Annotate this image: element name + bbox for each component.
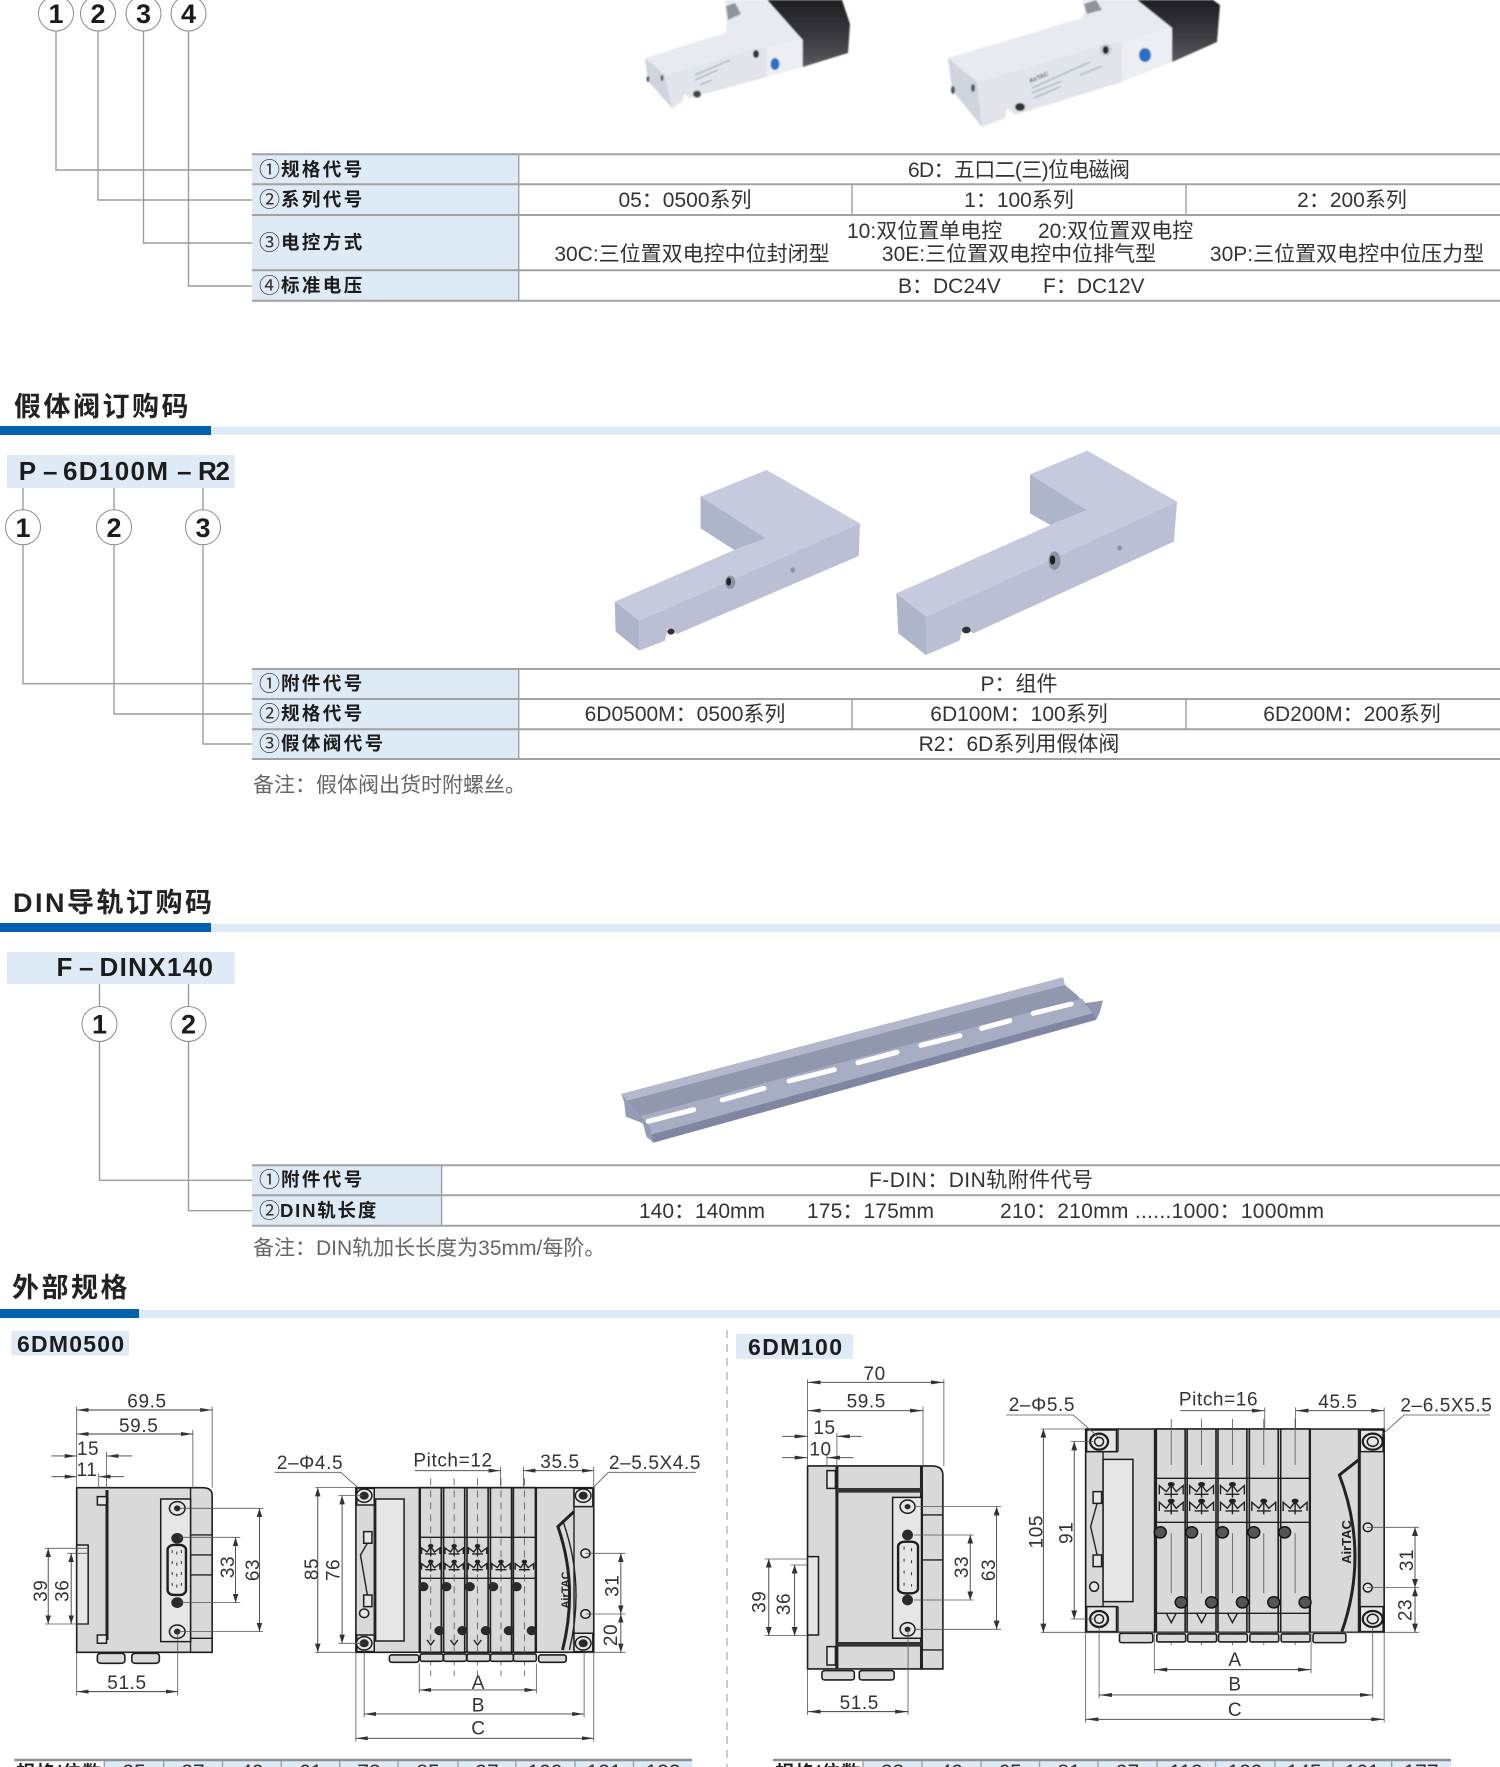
- dimension labels: 6DM0500 front view: 76: [324, 1559, 344, 1581]
- dimension labels: 6DM100 side view: 70: [864, 1364, 886, 1385]
- corner mounting holes: [1090, 1434, 1383, 1627]
- row 1: spec code: [259, 159, 1130, 182]
- heading: external dimensions: [0, 1273, 1500, 1318]
- dimension lines: front view: [275, 1467, 696, 1742]
- row 4: rated voltage: B：DC24V: [898, 275, 1001, 298]
- row 4: rated voltage: F：DC12V: [1043, 275, 1145, 298]
- row 2: series code: 系列代号: [281, 189, 365, 210]
- row 1: accessory code: [259, 673, 1058, 696]
- row 1: accessory code: 附件代号: [281, 1169, 365, 1190]
- dimension labels: 6DM100 front view: 105: [1026, 1515, 1047, 1548]
- code box: P-6D100M-R2: –: [43, 456, 57, 486]
- row 1: accessory code: P：组件: [980, 673, 1058, 696]
- row 3: dummy valve code: R2：6D系列用假体阀: [919, 733, 1119, 756]
- row 1: spec code: 6D：五口二(三)位电磁阀: [908, 159, 1130, 182]
- row 2: rail length: 210：210mm ......1000：1000mm: [1000, 1200, 1324, 1223]
- push-in fittings: [1119, 1633, 1346, 1643]
- row 2: spec code: 6D0500M：0500系列: [585, 703, 785, 726]
- dimension labels: 6DM0500 side view: 69.5: [127, 1392, 167, 1412]
- dimension labels: 6DM100 front view: 45.5: [1318, 1392, 1358, 1413]
- dimension labels: 6DM0500 front view: B: [472, 1696, 485, 1716]
- row 2: rail length: 140：140mm: [639, 1200, 765, 1223]
- DIN rail code circles and leaders: 1: [92, 1010, 107, 1040]
- dimension labels: 6DM0500 side view: 59.5: [119, 1416, 158, 1437]
- row 2: series code: ②: [259, 189, 280, 212]
- dimension labels: 6DM0500 front view: 2–Φ4.5: [277, 1453, 343, 1474]
- row 2: series code: 05：0500系列: [618, 189, 752, 212]
- row 2: spec code: 6D100M：100系列: [930, 703, 1108, 726]
- dimension labels: 6DM0500 front view: 20: [601, 1624, 622, 1646]
- heading: dummy valve ordering code: [0, 392, 1500, 435]
- photo: larger solenoid valve: [948, 0, 1220, 127]
- row 3: electric control type: 30E:三位置双电控中位排气型: [882, 243, 1156, 266]
- dimension labels: 6DM0500 side view: 33: [218, 1556, 239, 1578]
- row 3: electric control type: 20:双位置双电控: [1038, 220, 1193, 243]
- manifold valve stations: [418, 1478, 537, 1676]
- dimension labels: 6DM0500 front view: 2–5.5X4.5: [609, 1453, 701, 1474]
- row 1: accessory code: [259, 1169, 1093, 1192]
- push-in fittings: [389, 1654, 566, 1662]
- photo: DIN rail: [621, 977, 1103, 1143]
- row 2: spec code: 规格代号: [281, 703, 365, 724]
- dimension labels: 6DM100 side view: 36: [774, 1593, 795, 1615]
- heading: DIN rail ordering code: [0, 888, 1500, 932]
- dimension labels: 6DM100 front view: C: [1228, 1700, 1242, 1721]
- leader lines from code circles to table rows: [56, 31, 252, 286]
- dimension labels: 6DM100 front view: AirTAC: [1339, 1519, 1354, 1564]
- row 4: rated voltage: 标准电压: [281, 275, 365, 296]
- row 3: electric control type: 电控方式: [281, 232, 365, 253]
- divider between models: [726, 1330, 728, 1767]
- row 3: dummy valve code: 假体阀代号: [281, 733, 386, 754]
- dimension labels: 6DM100 front view: [1009, 1390, 1492, 1721]
- dimension labels: 6DM100 front view: 31: [1397, 1549, 1418, 1571]
- dummy valve code circles and leaders: 1: [15, 513, 31, 543]
- dimension labels: 6DM100 side view: [749, 1364, 1000, 1714]
- larger block: [896, 451, 1177, 655]
- manifold valve stations: [1154, 1419, 1311, 1645]
- row 2: spec code: [259, 703, 1441, 726]
- dimension labels: 6DM100 side view: 10: [809, 1440, 832, 1460]
- note: DIN rail: 备注：DIN轨加长长度为35mm/每阶。: [253, 1237, 605, 1260]
- row 3: electric control type: 30P:三位置双电控中位压力型: [1210, 243, 1484, 266]
- dimension labels: 6DM100 side view: 63: [979, 1559, 1000, 1581]
- dimension labels: 6DM100 side view: 15: [813, 1418, 836, 1439]
- dimension labels: 6DM0500 side view: 51.5: [107, 1673, 147, 1694]
- row 4: rated voltage: ④: [259, 275, 280, 298]
- row 1: spec code: 规格代号: [281, 159, 365, 180]
- drawing: 6DM100 front view: [1006, 1407, 1490, 1723]
- row 2: series code: 2：200系列: [1297, 189, 1407, 212]
- dimension labels: 6DM0500 side view: 39: [31, 1580, 52, 1602]
- dimension labels: 6DM0500 side view: 15: [77, 1439, 99, 1460]
- dimension labels: 6DM100 side view: 39: [749, 1591, 770, 1613]
- dimension labels: 6DM100 front view: A: [1228, 1650, 1242, 1671]
- row 1: accessory code: F-DIN：DIN轨附件代号: [869, 1169, 1093, 1192]
- row 3: electric control type: 30C:三位置双电控中位封闭型: [554, 243, 830, 266]
- photo: smaller solenoid valve: [645, 0, 850, 108]
- code circle 3: [126, 0, 161, 31]
- photo: dummy valve blocks: [615, 451, 1177, 655]
- code box: P-6D100M-R2: [7, 455, 234, 488]
- model tag: 6DM100: 6DM100: [748, 1334, 842, 1360]
- code box: P-6D100M-R2: R2: [198, 456, 230, 486]
- heading: DIN rail ordering code: DIN导轨订购码: [13, 888, 214, 918]
- corner mounting holes: [356, 1489, 591, 1650]
- row 2: spec code: ②: [259, 703, 280, 726]
- table: DIN rail code explanation: [252, 1165, 1500, 1226]
- heading: dummy valve ordering code: 假体阀订购码: [14, 392, 191, 422]
- photo: larger solenoid valve: AirTAC: [1029, 71, 1050, 85]
- row 2: rail length: DIN轨长度: [280, 1200, 378, 1221]
- row 3: electric control type: ③: [259, 232, 280, 255]
- row 2: series code: 1：100系列: [964, 189, 1074, 212]
- code box: F-DINX140: DINX140: [100, 952, 213, 982]
- dimension labels: 6DM0500 front view: [277, 1450, 701, 1740]
- code circle 2: [80, 0, 116, 31]
- dimension labels: 6DM0500 side view: 11: [77, 1460, 97, 1481]
- dimension labels: 6DM0500 front view: 31: [602, 1575, 624, 1597]
- code circle 4: [171, 0, 206, 31]
- row 1: accessory code: ①: [259, 673, 280, 696]
- dimension lines: side view: [765, 1379, 1001, 1715]
- dimension labels: 6DM0500 side view: 36: [52, 1580, 74, 1602]
- code box: F-DINX140: –: [79, 952, 93, 982]
- row 2: rail length: [259, 1200, 1324, 1223]
- dimension labels: 6DM0500 side view: [31, 1392, 264, 1694]
- DIN rail code circles and leaders: [82, 984, 252, 1211]
- dummy valve code circles and leaders: 2: [106, 513, 122, 543]
- dimension labels: 6DM100 side view: 33: [952, 1556, 973, 1578]
- dimension labels: 6DM100 front view: 91: [1056, 1522, 1077, 1544]
- code box: F-DINX140: F: [56, 952, 72, 982]
- table: 6DM100 dimensions (cropped at page bottom): [773, 1760, 1451, 1767]
- row 2: rail length: ②: [259, 1200, 280, 1223]
- model tag: 6DM0500: 6DM0500: [17, 1331, 124, 1357]
- table: dummy valve code explanation: [252, 669, 1500, 759]
- dimension labels: 6DM100 front view: Pitch=16: [1179, 1390, 1258, 1410]
- dimension labels: 6DM100 front view: 23: [1396, 1599, 1416, 1621]
- table: valve code explanation: [252, 154, 1500, 301]
- drawing: 6DM0500 front view: [275, 1467, 696, 1742]
- row 3: electric control type: [259, 220, 1484, 266]
- dimension lines: side view: [45, 1407, 263, 1696]
- row 1: spec code: ①: [259, 159, 280, 182]
- dimension labels: 6DM100 front view: 2–6.5X5.5: [1400, 1396, 1492, 1416]
- code box: P-6D100M-R2: 6D100M: [63, 456, 168, 486]
- row 1: accessory code: ①: [259, 1169, 280, 1192]
- code box: P-6D100M-R2: P: [19, 456, 36, 486]
- top section: ordering code diagram: [38, 0, 252, 286]
- dummy valve code circles and leaders: [6, 488, 252, 744]
- dimension labels: 6DM0500 front view: AirTAC: [560, 1571, 572, 1609]
- row 3: electric control type: 10:双位置单电控: [847, 220, 1002, 243]
- dimension labels: 6DM100 front view: B: [1228, 1674, 1242, 1696]
- drawing: 6DM100 side view: [765, 1379, 1001, 1715]
- dimension lines: front view: [1006, 1407, 1490, 1723]
- dimension labels: 6DM0500 front view: 85: [302, 1558, 323, 1580]
- row 1: accessory code: 附件代号: [281, 673, 365, 694]
- heading: external dimensions: 外部规格: [12, 1273, 130, 1303]
- dimension labels: 6DM100 side view: 51.5: [840, 1693, 879, 1714]
- table: 6DM0500 dimensions (cropped at page bottom): [14, 1760, 692, 1767]
- code circle 1: [38, 0, 74, 31]
- row 2: series code: [259, 189, 1407, 212]
- note: dummy valve: 备注：假体阀出货时附螺丝。: [253, 774, 526, 797]
- dimension labels: 6DM0500 front view: Pitch=12: [413, 1450, 493, 1472]
- row 2: rail length: 175：175mm: [807, 1200, 934, 1223]
- row 2: spec code: 6D200M：200系列: [1263, 703, 1441, 726]
- DIN rail code circles and leaders: 2: [181, 1010, 196, 1040]
- row 3: dummy valve code: ③: [259, 733, 280, 756]
- row 3: dummy valve code: [259, 733, 1119, 756]
- dimension labels: 6DM0500 side view: 63: [243, 1559, 264, 1581]
- dimension labels: 6DM0500 front view: C: [471, 1718, 486, 1740]
- dummy valve code circles and leaders: 3: [195, 513, 211, 543]
- dimension labels: 6DM0500 front view: 35.5: [540, 1452, 580, 1473]
- code box: P-6D100M-R2: –: [177, 456, 191, 486]
- code box: F-DINX140: [7, 952, 234, 984]
- dimension labels: 6DM100 front view: 2–Φ5.5: [1009, 1395, 1075, 1416]
- row 4: rated voltage: [259, 275, 1145, 298]
- drawing: 6DM0500 side view: [45, 1407, 263, 1696]
- smaller block: [615, 470, 860, 651]
- dimension labels: 6DM100 side view: 59.5: [847, 1392, 886, 1412]
- dimension labels: 6DM0500 front view: A: [472, 1673, 485, 1694]
